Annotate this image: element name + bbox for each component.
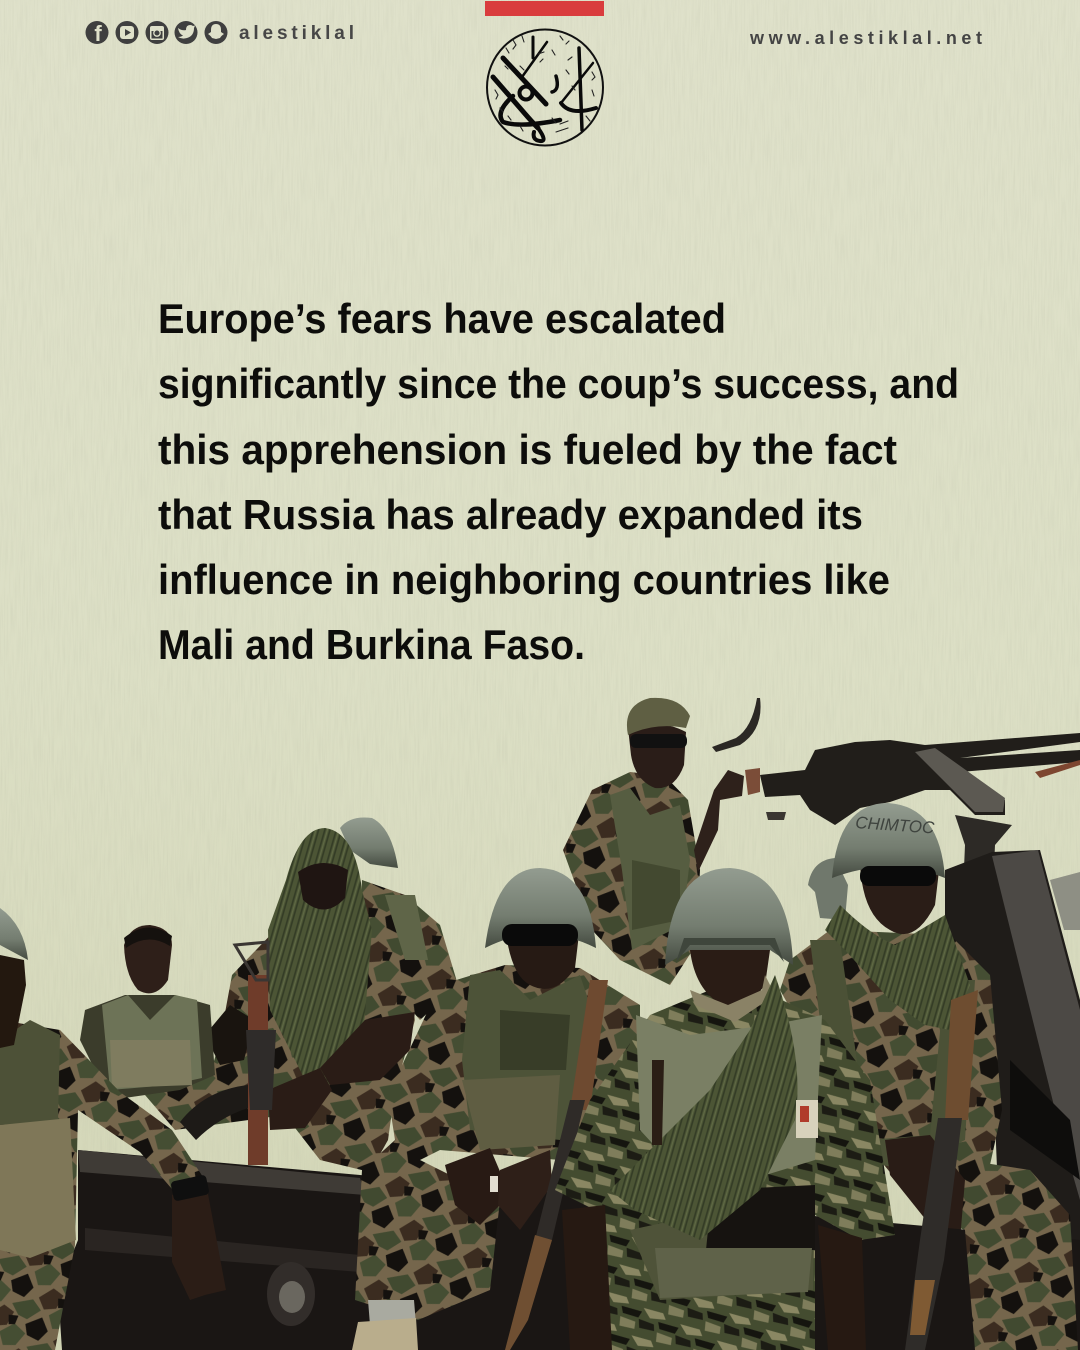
- soldier with vest at left: [80, 925, 215, 1100]
- top soldier on gun: [563, 698, 744, 985]
- website url: www.alestiklal.net: [749, 28, 982, 48]
- helmeted soldier behind: [340, 817, 458, 1020]
- social media icons: [86, 21, 228, 46]
- scarf soldier: [145, 828, 415, 1172]
- right soldier torso: [780, 803, 1002, 1240]
- pickup truck body: [58, 1150, 1080, 1350]
- main statement text: Europe’s fears have escalated: [158, 295, 726, 342]
- small helmet behind: [808, 858, 848, 920]
- social media icons: f: [94, 21, 102, 46]
- social handle: alestiklal: [239, 23, 354, 44]
- logo: calligraphic roundel: [487, 30, 603, 146]
- main statement text: Mali and Burkina Faso.: [158, 621, 585, 668]
- right soldier torso: CHIMTOC: [855, 813, 936, 838]
- main statement text: [158, 295, 959, 668]
- accent bar: [485, 1, 604, 16]
- main statement text: that Russia has already expanded its: [158, 491, 863, 538]
- photo: soldiers on a pickup truck: [0, 698, 1080, 1350]
- right soldier leg and rifle: [905, 990, 1078, 1350]
- truck cab frame: [945, 850, 1080, 1240]
- centre seated soldier: [352, 868, 640, 1350]
- front centre soldier: [555, 868, 895, 1350]
- far left soldier: [0, 908, 226, 1350]
- main statement text: influence in neighboring countries like: [158, 556, 890, 603]
- mounted machine gun: [712, 698, 1080, 960]
- main statement text: this apprehension is fueled by the fact: [158, 426, 897, 473]
- main statement text: significantly since the coup’s success, and: [158, 360, 959, 407]
